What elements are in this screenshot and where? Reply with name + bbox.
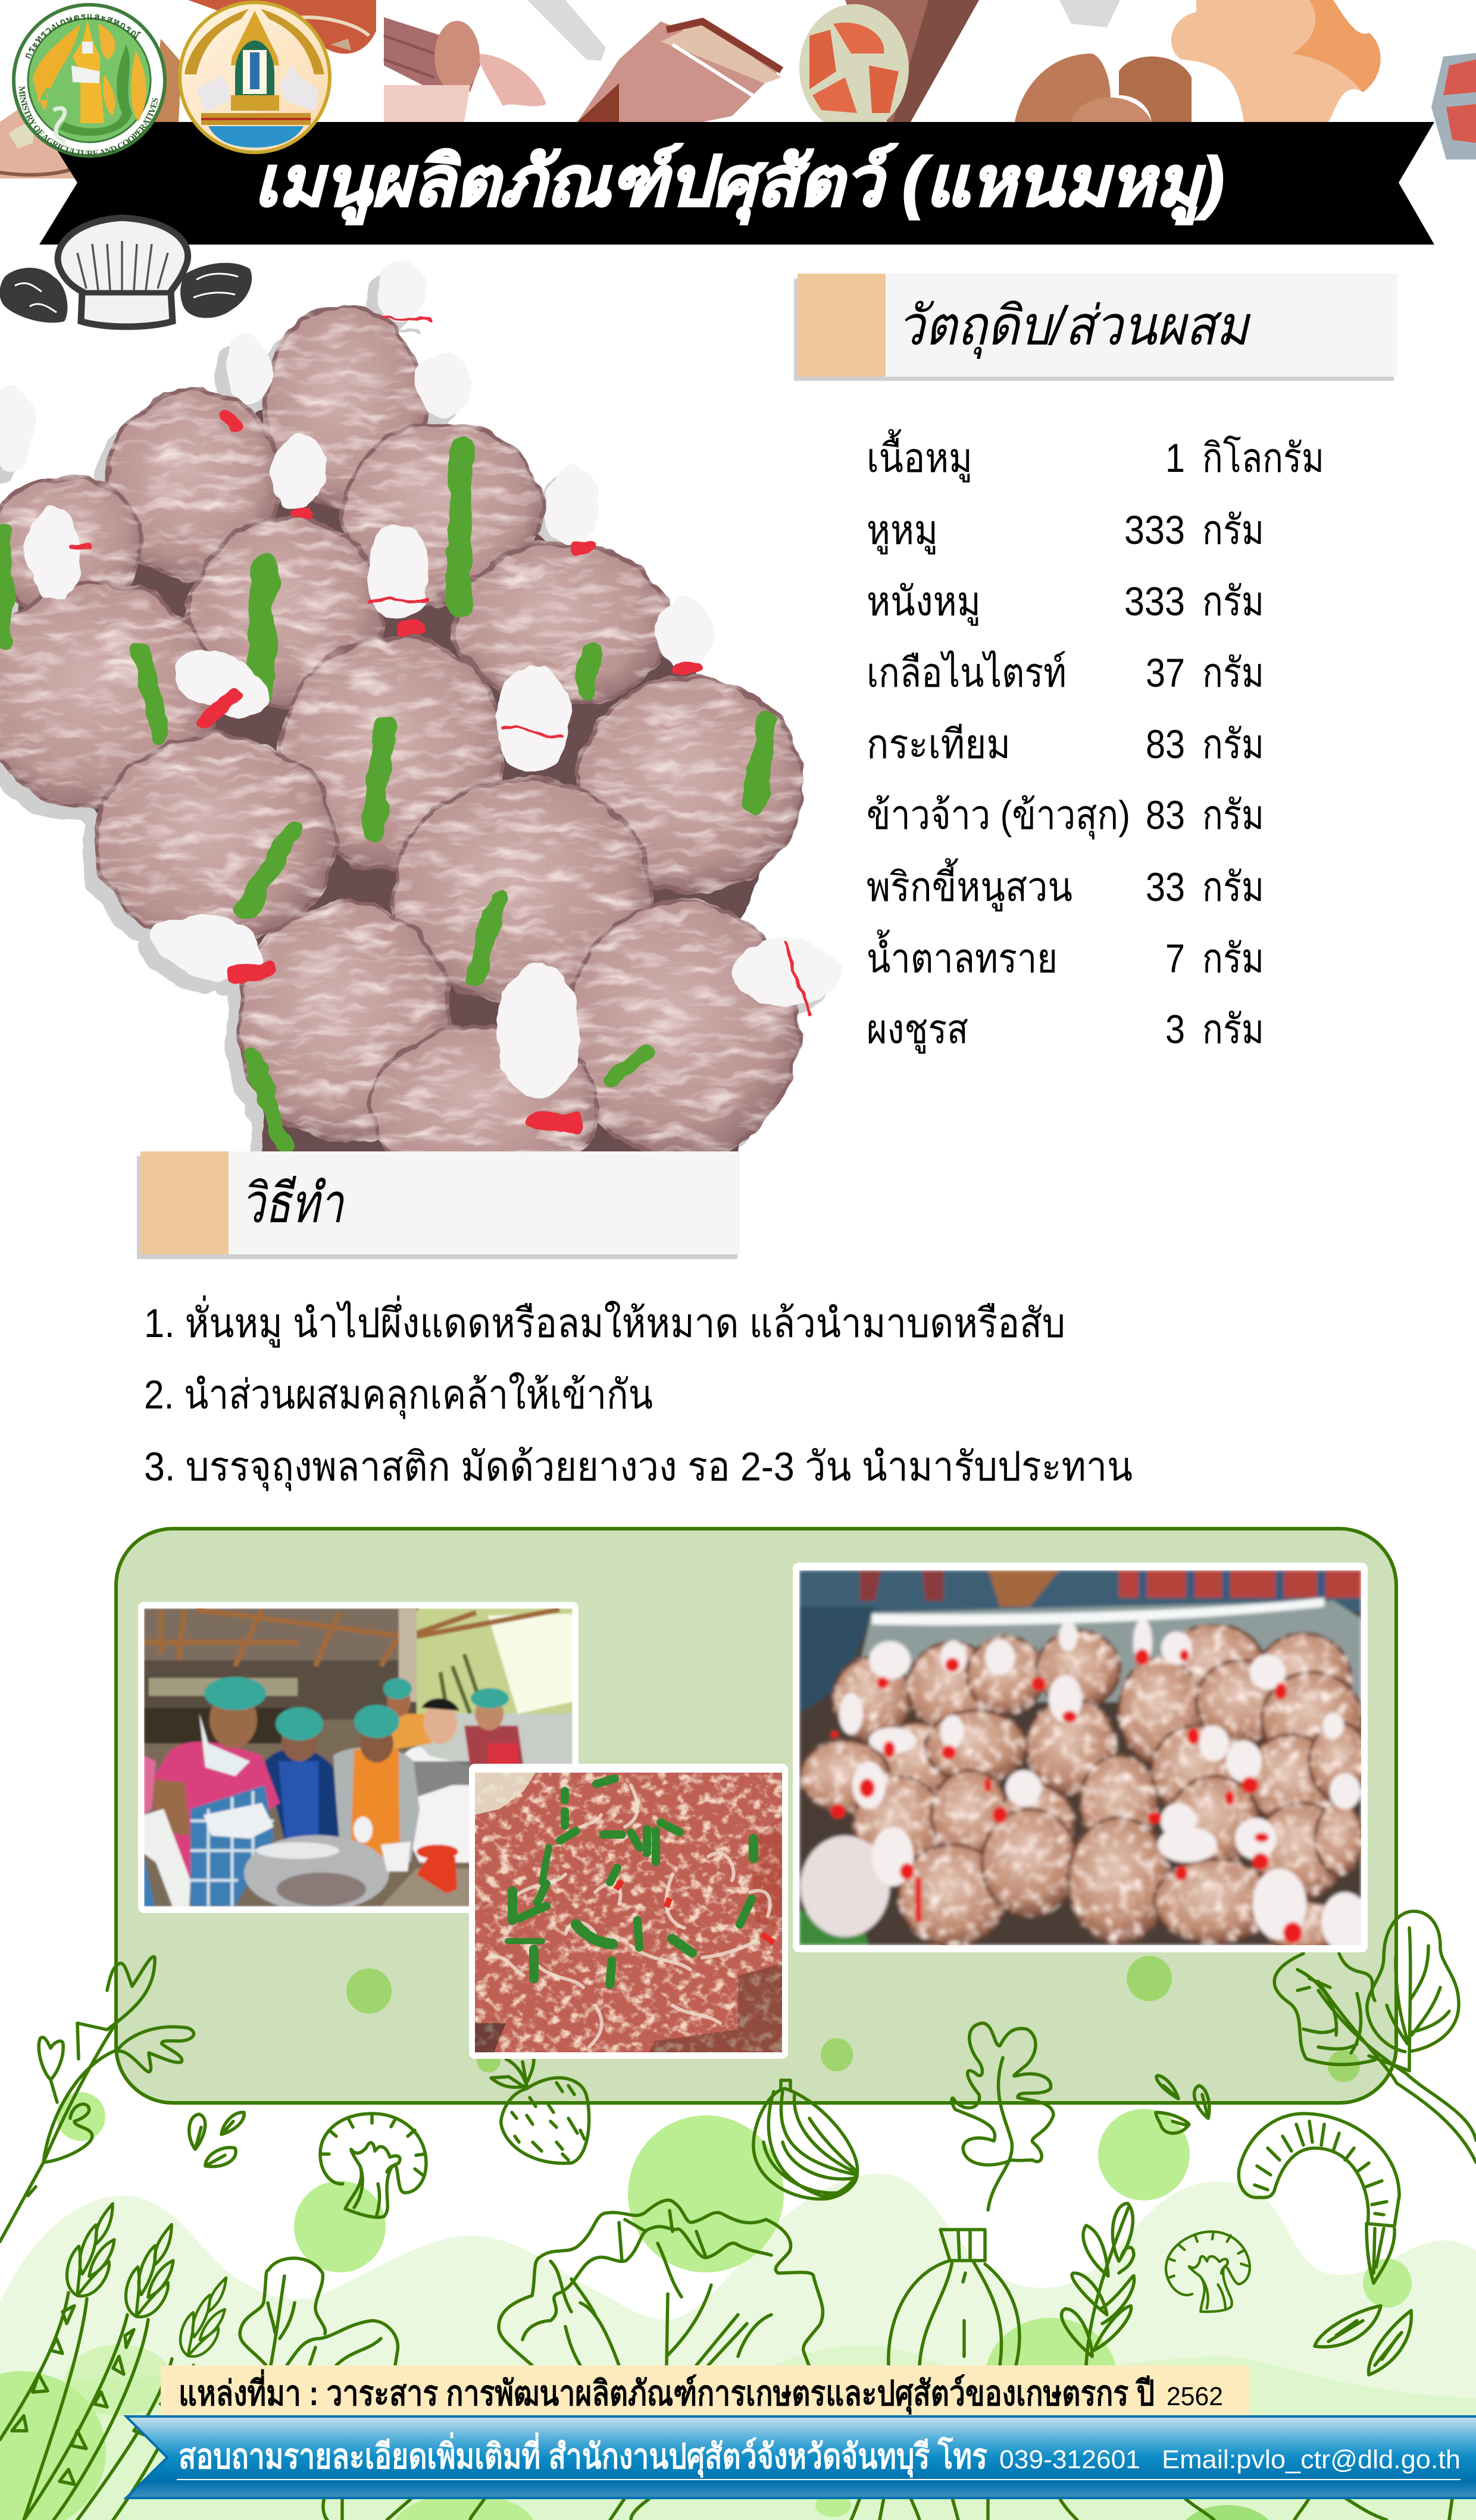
heading shadow (794, 278, 1394, 381)
ingredient: nitrate salt: เกลือไนไตรท์ (867, 650, 1067, 696)
ingredient: pork: กิโลกรัม (1202, 435, 1324, 481)
doodle: asparagus left (0, 2196, 130, 2520)
light green circles (0, 2092, 1412, 2520)
heading accent (140, 1151, 229, 1254)
ingredient: MSG: กรัม (1202, 1007, 1264, 1052)
doodle: lettuce (499, 2200, 823, 2365)
photo scene: mixing bowl (244, 1817, 411, 1911)
ingredient: chilli (867, 858, 1264, 912)
heading shadow (137, 1156, 737, 1259)
footer background hills (0, 2092, 1476, 2520)
photo scene: shelter background (144, 1607, 573, 1907)
ingredient: garlic: 83 (1146, 722, 1185, 767)
ingredient: pork skin: หนังหมู (867, 579, 981, 626)
doodle: three small leaves (189, 2112, 244, 2167)
plastic bag knots (0, 261, 839, 1098)
heading text: วิธีทำ (241, 1173, 345, 1234)
ingredient: MSG: 3 (1165, 1007, 1185, 1052)
photo scene: green chillies (508, 1779, 753, 1984)
ingredient: nitrate salt: กรัม (1202, 650, 1264, 696)
photo scene: knots (800, 1619, 1369, 1952)
photo: mixed pork and chillies (469, 1764, 788, 2059)
logo: Ministry of Agriculture and Cooperatives: MINISTRY OF AGRICULTURE AND COOPERATIVES (19, 86, 158, 156)
title banner (39, 122, 1434, 245)
lower hills (0, 2345, 1476, 2520)
green photo panel (116, 1529, 1396, 2103)
ingredient: pork (867, 429, 1324, 483)
ingredient: MSG: ผงชูรส (867, 1007, 968, 1054)
doodle: oak leaf (952, 2023, 1053, 2210)
contact ribbon (126, 2416, 1476, 2498)
step 2: 2. นำส่วนผสมคลุกเคล้าให้เข้ากัน (144, 1372, 653, 1419)
ingredient: garlic: กรัม (1202, 722, 1264, 767)
source note bar (161, 2365, 1250, 2416)
photo scene: tray background (799, 1570, 1361, 1945)
contact text: 039-312601 (999, 2445, 1140, 2474)
photo scene: red chillies (616, 1880, 774, 1943)
photo frame (138, 1602, 578, 1913)
ingredient: pork skin (867, 579, 1264, 626)
ingredient: pork skin: 333 (1124, 579, 1185, 624)
ingredient: cooked rice: ข้าวจ้าว (ข้าวสุก) (867, 793, 1130, 840)
heading text: วัตถุดิบ/ส่วนผสม (897, 296, 1251, 359)
doodle: shrimp (1239, 2114, 1399, 2283)
photo frame (793, 1563, 1368, 1952)
ingredient: chilli: 33 (1146, 865, 1185, 910)
logo: Ministry of Agriculture and Cooperatives (12, 3, 167, 158)
doodle: strawberry (491, 2059, 589, 2164)
doodle: asparagus right (77, 2270, 241, 2520)
photo scene: meat mixture texture (475, 1773, 782, 2052)
doodle: large spinach over panel corner (1274, 1911, 1476, 2162)
illustration: roast chicken (1171, 0, 1381, 122)
pouches (0, 306, 803, 1187)
photo: bagged fermented pork (0, 261, 839, 1187)
ingredient: pig ears: หูหมู (867, 508, 938, 555)
ingredient list (867, 429, 1324, 1054)
illustration: salami (384, 17, 546, 122)
logo: provincial seal (180, 2, 330, 152)
ingredient: cooked rice: 83 (1146, 793, 1185, 838)
photo scene: people (144, 1687, 573, 1907)
logo: Ministry of Agriculture and Cooperatives: กระทรวงเกษตรและสหกรณ์ (26, 14, 142, 60)
doodle: mushroom small (1157, 2220, 1262, 2324)
heading: method (137, 1151, 740, 1259)
step 3: 3. บรรจุถุงพลาสติก มัดด้วยยางวง รอ 2-3 วัน นำมารับประทาน (144, 1444, 1133, 1491)
photo scene: red scale (417, 1845, 458, 1893)
illustration: steak at right edge (1431, 53, 1476, 159)
ingredient: garlic (867, 722, 1264, 767)
doodle: mushroom (320, 2114, 426, 2217)
doodle: herb sprig (1062, 2203, 1134, 2365)
source note text: แหล่งที่มา : วาระสาร การพัฒนาผลิตภัณฑ์การเกษตรและปศุสัตว์ของเกษตรกร ปี (179, 2369, 1155, 2415)
ingredient: sugar: 7 (1165, 936, 1185, 981)
ingredient: nitrate salt: 37 (1146, 650, 1185, 696)
icon: chef hat (58, 218, 188, 327)
illustration: sausages (1015, 54, 1192, 122)
doodle: onion (753, 2080, 858, 2199)
ingredient: chilli: กรัม (1202, 865, 1264, 910)
icon: right meat cut (180, 263, 252, 318)
doodle: fragments below banner (323, 2498, 1452, 2520)
ingredient: pork: 1 (1165, 436, 1185, 481)
illustration: red meat cut (188, 0, 376, 54)
contact text: Email:pvlo_ctr@dld.go.th (1162, 2445, 1461, 2474)
ingredient: nitrate salt (867, 650, 1264, 696)
icon: chef hat with meat (0, 218, 252, 327)
source note text: 2562 (1167, 2382, 1223, 2411)
vegetable line doodles (0, 1956, 1452, 2520)
title text: เมนูผลิตภัณฑ์ปศุสัตว์ (แหนมหมู) (254, 143, 1224, 225)
doodle: zucchini (889, 2230, 1020, 2365)
illustration: ham (577, 21, 781, 122)
doodle: leaf trio right (1156, 2076, 1209, 2133)
photo: tray of bagged pork (793, 1563, 1369, 1955)
ingredient: garlic: กระเทียม (867, 722, 1011, 767)
ingredient: sugar (867, 929, 1264, 981)
illustration: pink meat behind seal (0, 39, 182, 179)
photo frame (469, 1764, 788, 2059)
ingredient: sugar: กรัม (1202, 936, 1264, 981)
heading panel (140, 1151, 740, 1254)
contact text (177, 2432, 1461, 2480)
ingredient: MSG (867, 1007, 1264, 1054)
photo scene: hairnets (204, 1677, 509, 1740)
doodle: two long leaves (1315, 2306, 1411, 2375)
ingredient: pig ears: 333 (1124, 508, 1185, 553)
banner ribbon (39, 122, 1434, 245)
ingredient: pork skin: กรัม (1202, 579, 1264, 624)
doodle: vine left (0, 1956, 194, 2242)
cluster shadow base (18, 357, 762, 1166)
ingredient: pork: เนื้อหมู (867, 429, 972, 483)
method steps (144, 1295, 1133, 1491)
step 1: 1. หั่นหมู นำไปผึ่งแดดหรือลมให้หมาด แล้วนำมาบดหรือสับ (144, 1295, 1065, 1348)
heading panel (798, 274, 1397, 377)
photo scene: red ties (831, 1649, 1302, 1943)
ingredient: sugar: น้ำตาลทราย (867, 929, 1058, 981)
photo scene: shredded pork skin (488, 1785, 770, 2047)
contact text: สอบถามรายละเอียดเพิ่มเติมที่ สำนักงานปศุสัตว์จังหวัดจันทบุรี โทร (179, 2432, 987, 2478)
pale green hills (0, 2174, 1476, 2520)
ingredient: pig ears: กรัม (1202, 508, 1264, 553)
photo scene: pouches (800, 1624, 1369, 1955)
doodle: asparagus centre (24, 2217, 189, 2520)
illustration: steak (799, 0, 979, 133)
panel dots (346, 1956, 1360, 2082)
source note (161, 2365, 1250, 2416)
ingredient: cooked rice: กรัม (1202, 793, 1264, 838)
doodle: small spinach (240, 2258, 398, 2365)
illustration: grey marks (527, 0, 1120, 61)
contact banner (126, 2416, 1476, 2498)
green chilli strips (4, 452, 765, 1148)
red rubber band ties (71, 318, 809, 1123)
icon: left meat cut (0, 268, 67, 323)
ingredient: pig ears (867, 508, 1264, 555)
header meat illustrations (0, 0, 1476, 179)
ingredient: chilli: พริกขี้หนูสวน (867, 858, 1072, 912)
photo: villagers preparing pork (138, 1602, 578, 1913)
heading: ingredients (794, 274, 1397, 381)
heading accent (798, 274, 886, 377)
